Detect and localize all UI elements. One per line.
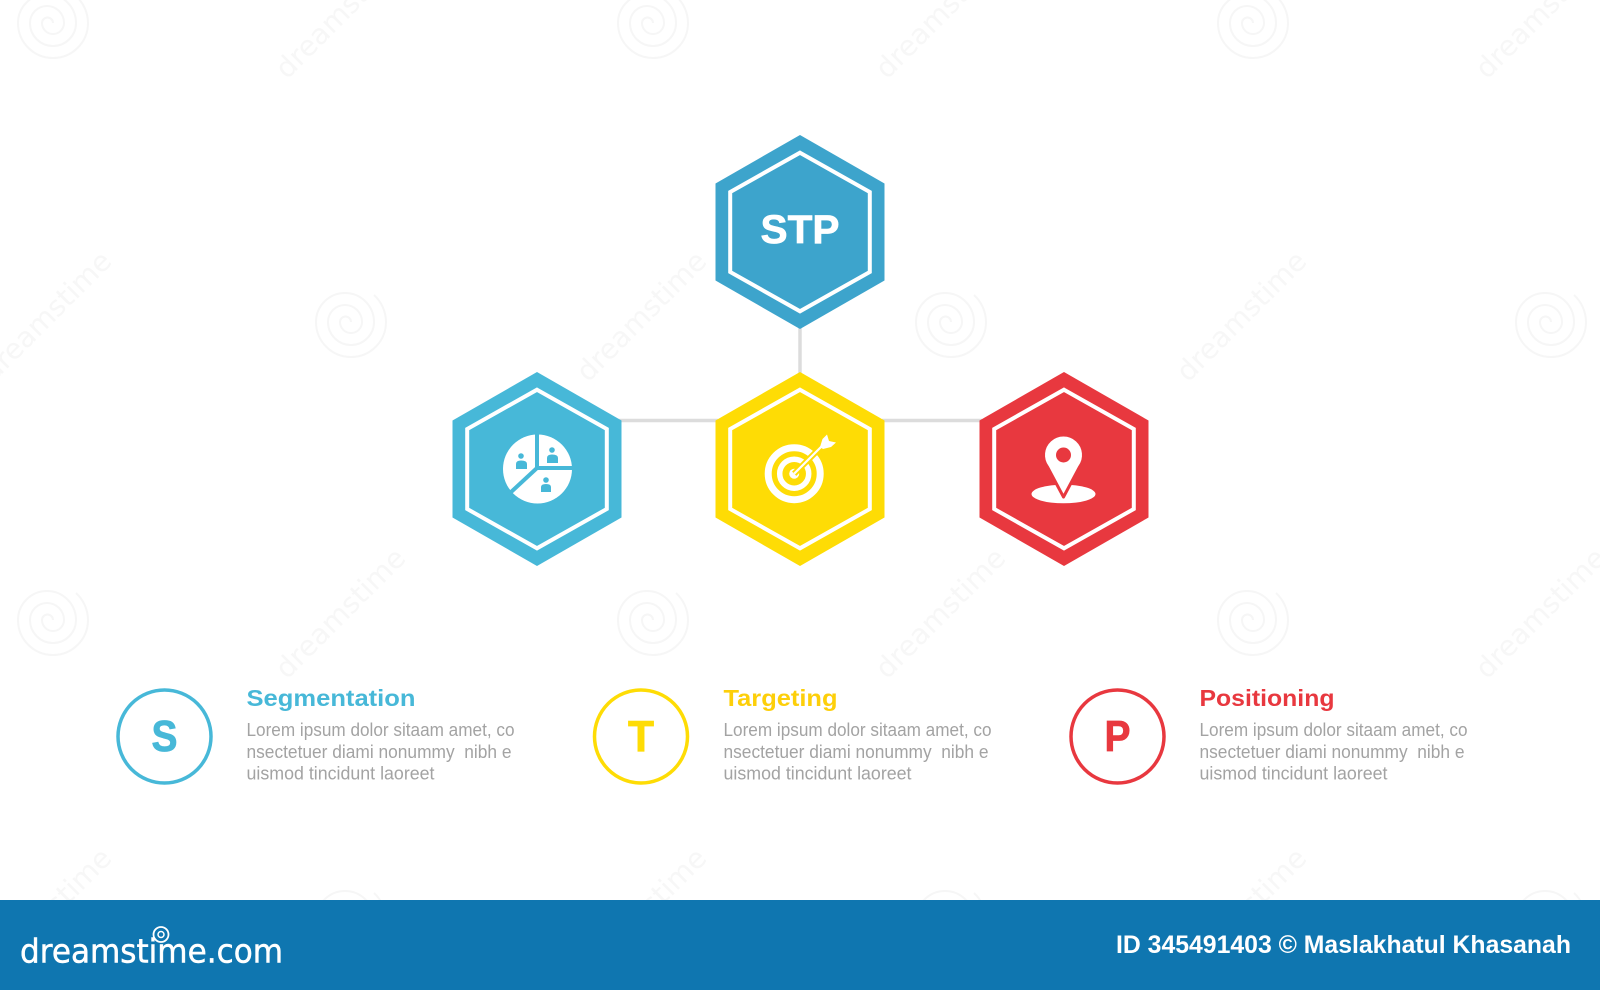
hexagon: STP — [716, 135, 884, 329]
hexagon: positioning — [980, 372, 1148, 566]
body text: nsectetuer diami nonummy nibh e — [724, 741, 988, 762]
circle badge T: T — [628, 712, 654, 761]
watermark pattern: dreamstime — [869, 541, 1012, 685]
hexagon: segmentation — [452, 372, 622, 566]
watermark pattern: dreamstime — [570, 244, 713, 388]
item: segmentation — [118, 685, 514, 784]
hexagon: targeting — [716, 372, 884, 566]
body text: Lorem ipsum dolor sitaam amet, co — [1200, 719, 1468, 740]
circle badge T — [594, 690, 688, 783]
watermark pattern: dreamstime — [269, 541, 412, 685]
footer bar — [0, 900, 1600, 990]
circle badge P: P — [1104, 712, 1130, 761]
watermark pattern: dreamstime — [1170, 244, 1313, 388]
body text: nsectetuer diami nonummy nibh e — [1200, 741, 1464, 762]
icon: pie chart with people — [503, 432, 574, 504]
hexagon: STP: STP — [760, 208, 840, 252]
body text: uismod tincidunt laoreet — [724, 762, 912, 784]
heading: Positioning — [1200, 685, 1334, 711]
heading: Segmentation — [246, 685, 416, 711]
body text: nsectetuer diami nonummy nibh e — [246, 741, 512, 762]
item: positioning — [1071, 685, 1468, 784]
body text: uismod tincidunt laoreet — [246, 762, 434, 784]
body text — [246, 719, 514, 784]
connector lines — [618, 326, 982, 420]
body text: Lorem ipsum dolor sitaam amet, co — [246, 719, 514, 740]
body text: uismod tincidunt laoreet — [1200, 762, 1388, 784]
item: targeting — [594, 685, 992, 784]
icon: target with arrow — [768, 434, 836, 500]
watermark pattern: dreamstime — [1170, 841, 1313, 985]
footer logo: dreamstime.com — [20, 932, 283, 970]
icon: map pin — [1032, 435, 1096, 503]
heading: Targeting — [724, 685, 838, 711]
body text — [724, 719, 992, 784]
circle badge P — [1071, 690, 1164, 783]
footer credit: ID 345491403 © Maslakhatul Khasanah — [1116, 931, 1571, 959]
body text — [1200, 719, 1468, 784]
circle badge S: S — [152, 712, 178, 761]
watermark pattern: dreamstime — [570, 841, 713, 985]
circle badge S — [118, 690, 211, 783]
body text: Lorem ipsum dolor sitaam amet, co — [724, 719, 992, 740]
